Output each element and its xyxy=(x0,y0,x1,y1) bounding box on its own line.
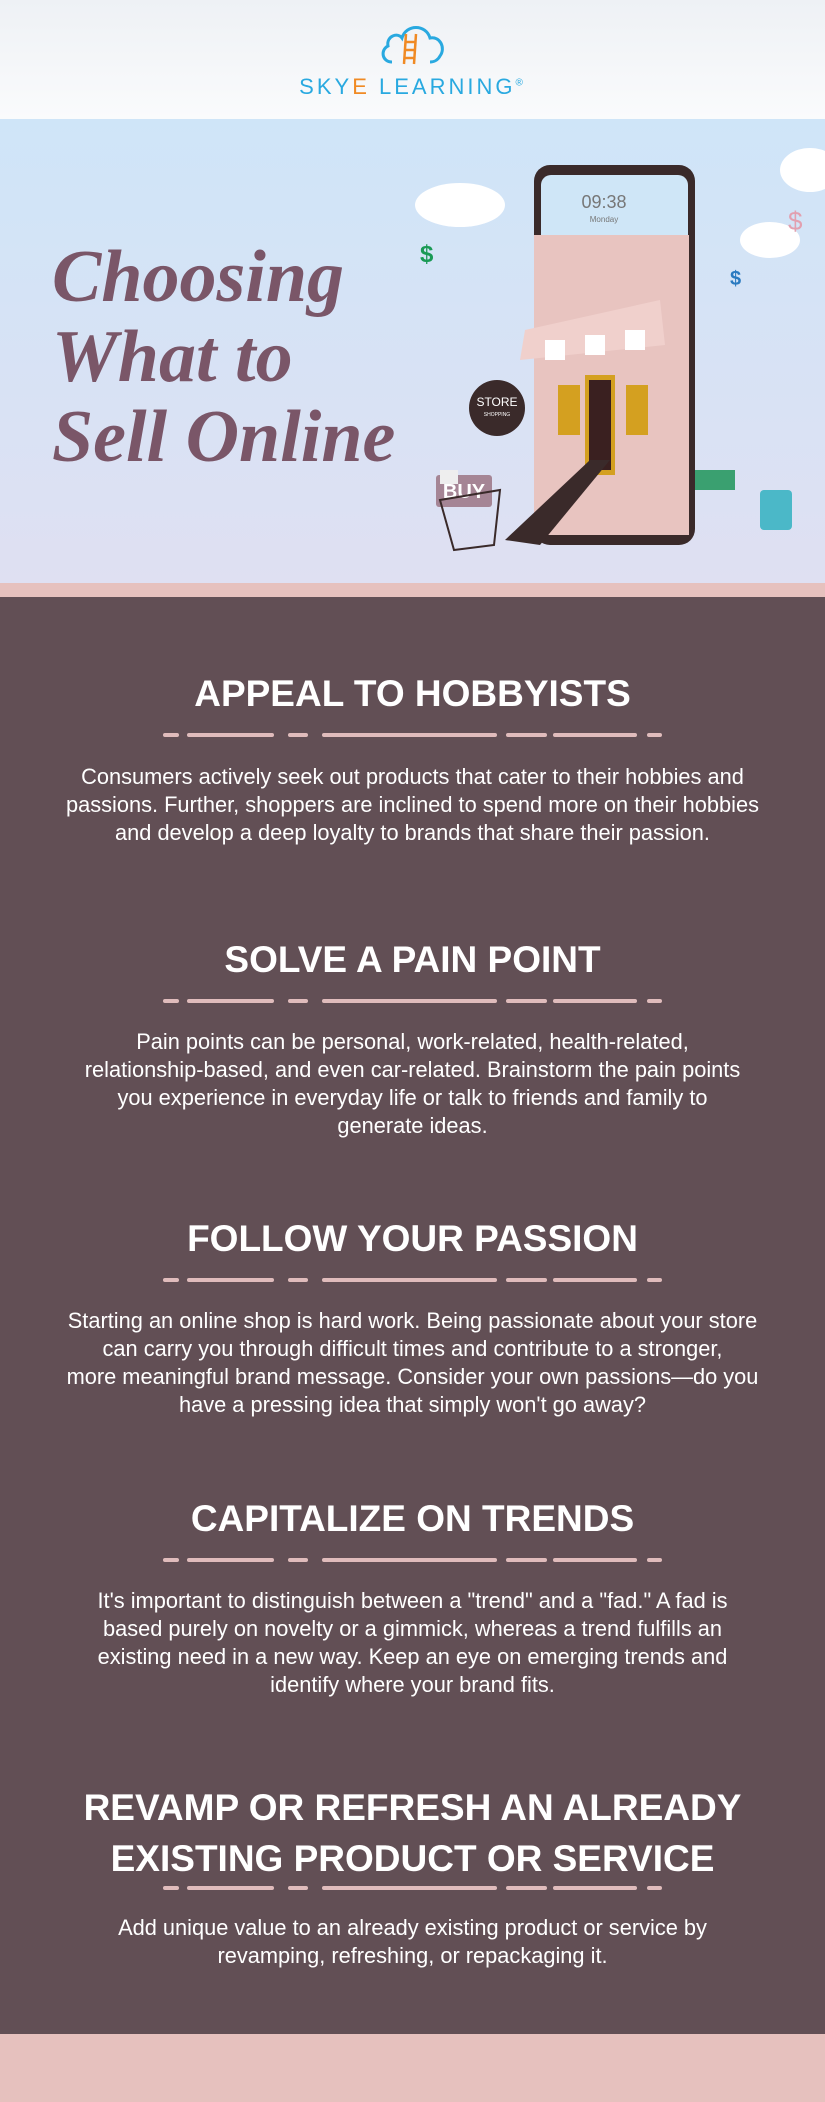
body text: Consumers actively seek out products that cater to their hobbies and xyxy=(81,764,744,789)
body text: Pain points can be personal, work-related, health-related, xyxy=(136,1029,689,1054)
body text: revamping, refreshing, or repackaging it. xyxy=(217,1943,608,1968)
divider xyxy=(163,1278,662,1282)
body text: Starting an online shop is hard work. Being passionate about your store xyxy=(68,1308,757,1333)
header: logo xyxy=(0,0,825,119)
heading: CAPITALIZE ON TRENDS xyxy=(191,1498,634,1539)
pink band xyxy=(0,583,825,597)
body text: relationship-based, and even car-related. Brainstorm the pain points xyxy=(85,1057,740,1082)
illustration: phone storefront: $ xyxy=(788,206,803,236)
heading: FOLLOW YOUR PASSION xyxy=(187,1218,638,1259)
body text: passions. Further, shoppers are inclined to spend more on their hobbies xyxy=(66,792,759,817)
hero panel xyxy=(0,119,825,583)
body text: more meaningful brand message. Consider your own passions—do you xyxy=(67,1364,758,1389)
heading: APPEAL TO HOBBYISTS xyxy=(194,673,631,714)
icon: cloud with ladder xyxy=(382,26,444,64)
body text: Add unique value to an already existing product or service by xyxy=(118,1915,707,1940)
hero title: Sell Online xyxy=(52,396,395,478)
body text xyxy=(67,1308,758,1417)
body text: identify where your brand fits. xyxy=(270,1672,555,1697)
section: solve a pain point xyxy=(85,939,740,1138)
body text xyxy=(85,1029,740,1138)
body text: It's important to distinguish between a "trend" and a "fad." A fad is xyxy=(97,1588,728,1613)
illustration: phone storefront: Monday xyxy=(590,215,618,224)
body text: have a pressing idea that simply won't go away? xyxy=(179,1392,646,1417)
footer band xyxy=(0,2034,825,2102)
section: revamp or refresh xyxy=(84,1787,741,1968)
heading: SOLVE A PAIN POINT xyxy=(224,939,601,980)
body text: generate ideas. xyxy=(337,1113,488,1138)
hero title: Choosing xyxy=(52,236,344,318)
illustration: phone storefront: $ xyxy=(730,268,741,290)
body text: and develop a deep loyalty to brands that share their passion. xyxy=(115,820,710,845)
body text xyxy=(97,1588,728,1697)
section: follow your passion xyxy=(67,1218,758,1417)
divider xyxy=(163,1558,662,1562)
body text: existing need in a new way. Keep an eye on emerging trends and xyxy=(98,1644,727,1669)
body text: you experience in everyday life or talk to friends and family to xyxy=(117,1085,708,1110)
section: appeal to hobbyists xyxy=(66,673,759,845)
illustration: phone storefront: SHOPPING xyxy=(484,412,510,418)
divider xyxy=(163,999,662,1003)
heading: REVAMP OR REFRESH AN ALREADY xyxy=(84,1787,741,1828)
hero title: What to xyxy=(52,316,293,398)
divider xyxy=(163,1886,662,1890)
body text xyxy=(118,1915,707,1968)
heading: EXISTING PRODUCT OR SERVICE xyxy=(111,1838,714,1879)
section: capitalize on trends xyxy=(97,1498,728,1697)
hero title xyxy=(52,236,395,478)
divider xyxy=(163,733,662,737)
body text: based purely on novelty or a gimmick, whereas a trend fulfills an xyxy=(103,1616,722,1641)
body text xyxy=(66,764,759,845)
logo text: SKYE LEARNING® xyxy=(299,74,526,99)
illustration: phone storefront: STORE xyxy=(476,395,518,409)
illustration: phone storefront: 09:38 xyxy=(581,192,627,212)
heading xyxy=(84,1787,741,1879)
illustration: phone storefront xyxy=(415,148,825,552)
body text: can carry you through difficult times and contribute to a stronger, xyxy=(103,1336,722,1361)
illustration: phone storefront: $ xyxy=(420,241,434,268)
illustration: phone storefront: BUY xyxy=(443,481,486,503)
